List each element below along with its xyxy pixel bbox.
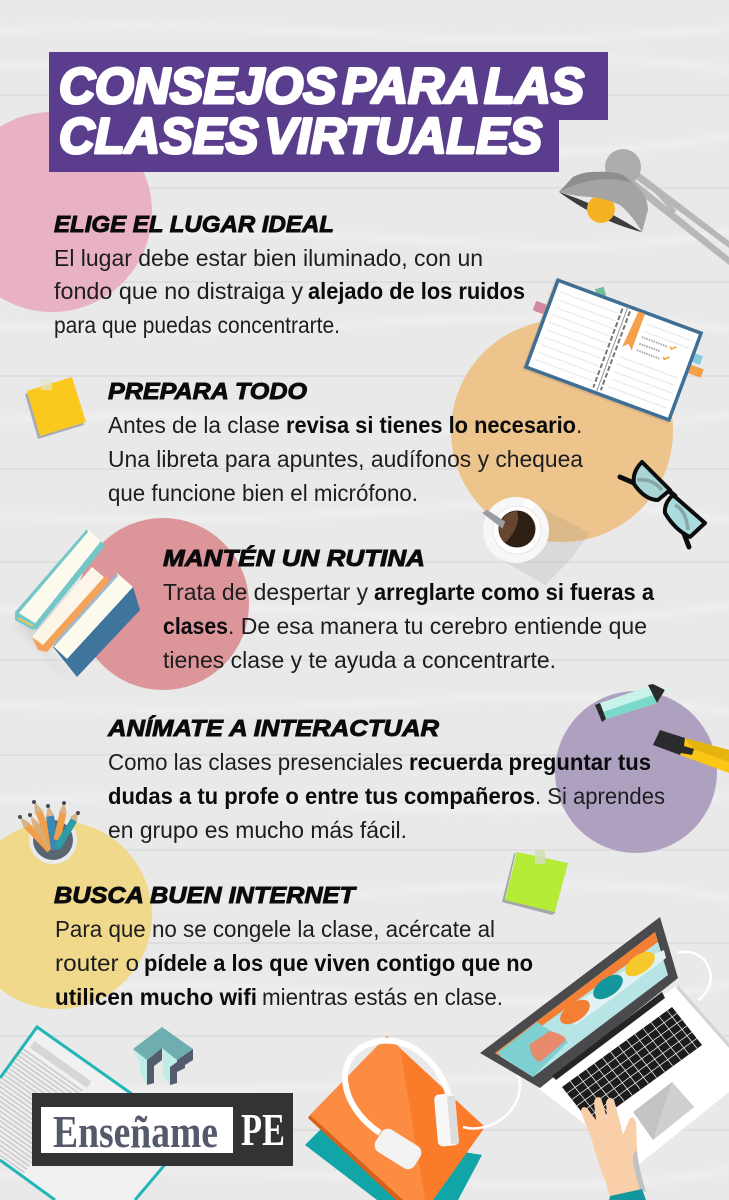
section: mantén un rutina: arreglarte como si fueras a: [374, 579, 654, 605]
icon: laptop with hand: [480, 917, 729, 1200]
icon: teal marker: [595, 684, 672, 722]
icon: pencil cup: [18, 800, 80, 864]
logo: Enseñame PE: [32, 1093, 293, 1166]
icon: newspaper: [0, 1024, 166, 1200]
icon: green sticky note: [502, 850, 568, 915]
section: busca buen internet: Para que no se congele la clase, acércate al: [55, 916, 495, 942]
section: elige el lugar ideal: [54, 211, 525, 338]
title banner: [49, 52, 608, 172]
section: mantén un rutina: [163, 544, 654, 673]
section: busca buen internet: utilicen mucho wifi: [55, 984, 257, 1010]
icon: desk lamp: [559, 149, 729, 265]
icon: books with headphones: [305, 1036, 520, 1200]
section: mantén un rutina: tienes clase y te ayuda a concentrarte.: [163, 647, 556, 673]
section: mantén un rutina: clases: [163, 613, 228, 639]
section: anímate a interactuar: Como las clases presenciales: [108, 749, 403, 775]
icon: open notebook: [522, 278, 704, 424]
orange circle: [451, 320, 673, 542]
yellow circle: [0, 821, 152, 1009]
section: busca buen internet: [54, 882, 533, 1010]
purple circle: [555, 691, 717, 853]
section: elige el lugar ideal: ELIGE EL LUGAR IDEAL: [54, 211, 334, 237]
icon: coffee cup: [483, 497, 590, 585]
section: prepara todo: que funcione bien el micrófono.: [108, 480, 418, 506]
section: elige el lugar ideal: para que puedas concentrarte.: [54, 312, 340, 338]
section: busca buen internet: BUSCA BUEN INTERNET: [54, 882, 357, 908]
section: elige el lugar ideal: alejado de los ruidos: [308, 278, 525, 304]
pink circle: [0, 112, 152, 312]
red circle: [77, 518, 249, 690]
section: prepara todo: [108, 378, 583, 506]
section: mantén un rutina: MANTÉN UN RUTINA: [163, 544, 425, 571]
title banner: CLASES VIRTUALES: [59, 108, 542, 164]
icon: small house model: [133, 1027, 193, 1085]
logo: Enseñame PE: Enseñame: [53, 1107, 218, 1157]
section: anímate a interactuar: . Si aprendes: [535, 783, 665, 809]
section: anímate a interactuar: ANÍMATE A INTERACTUAR: [107, 714, 439, 741]
section: anímate a interactuar: en grupo es mucho más fácil.: [108, 817, 407, 843]
section: elige el lugar ideal: El lugar debe estar bien iluminado, con un: [54, 245, 483, 271]
section: mantén un rutina: . De esa manera tu cerebro entiende que: [228, 613, 647, 639]
icon: yellow sticky note: [25, 377, 86, 439]
icon: stacked books: [15, 529, 140, 690]
section: busca buen internet: pídele a los que viven contigo que no: [144, 950, 533, 976]
section: prepara todo: PREPARA TODO: [108, 378, 307, 404]
icon: yellow highlighter: [653, 730, 729, 773]
title banner: CONSEJOS PARA LAS: [59, 58, 584, 114]
section: elige el lugar ideal: fondo que no distraiga y: [54, 278, 304, 304]
section: busca buen internet: router o: [55, 950, 139, 976]
section: prepara todo: Una libreta para apuntes, audífonos y chequea: [108, 446, 583, 472]
section: anímate a interactuar: [107, 714, 665, 843]
icon: glasses: [620, 462, 705, 547]
section: busca buen internet: mientras estás en clase.: [262, 984, 503, 1010]
section: prepara todo: revisa si tienes lo necesario: [286, 412, 576, 438]
section: prepara todo: Antes de la clase: [108, 412, 280, 438]
section: anímate a interactuar: dudas a tu profe o entre tus compañeros: [108, 783, 535, 809]
logo: Enseñame PE: PE: [241, 1105, 285, 1155]
section: anímate a interactuar: recuerda preguntar tus: [409, 749, 651, 775]
section: mantén un rutina: Trata de despertar y: [163, 579, 368, 605]
section: prepara todo: .: [576, 412, 582, 438]
